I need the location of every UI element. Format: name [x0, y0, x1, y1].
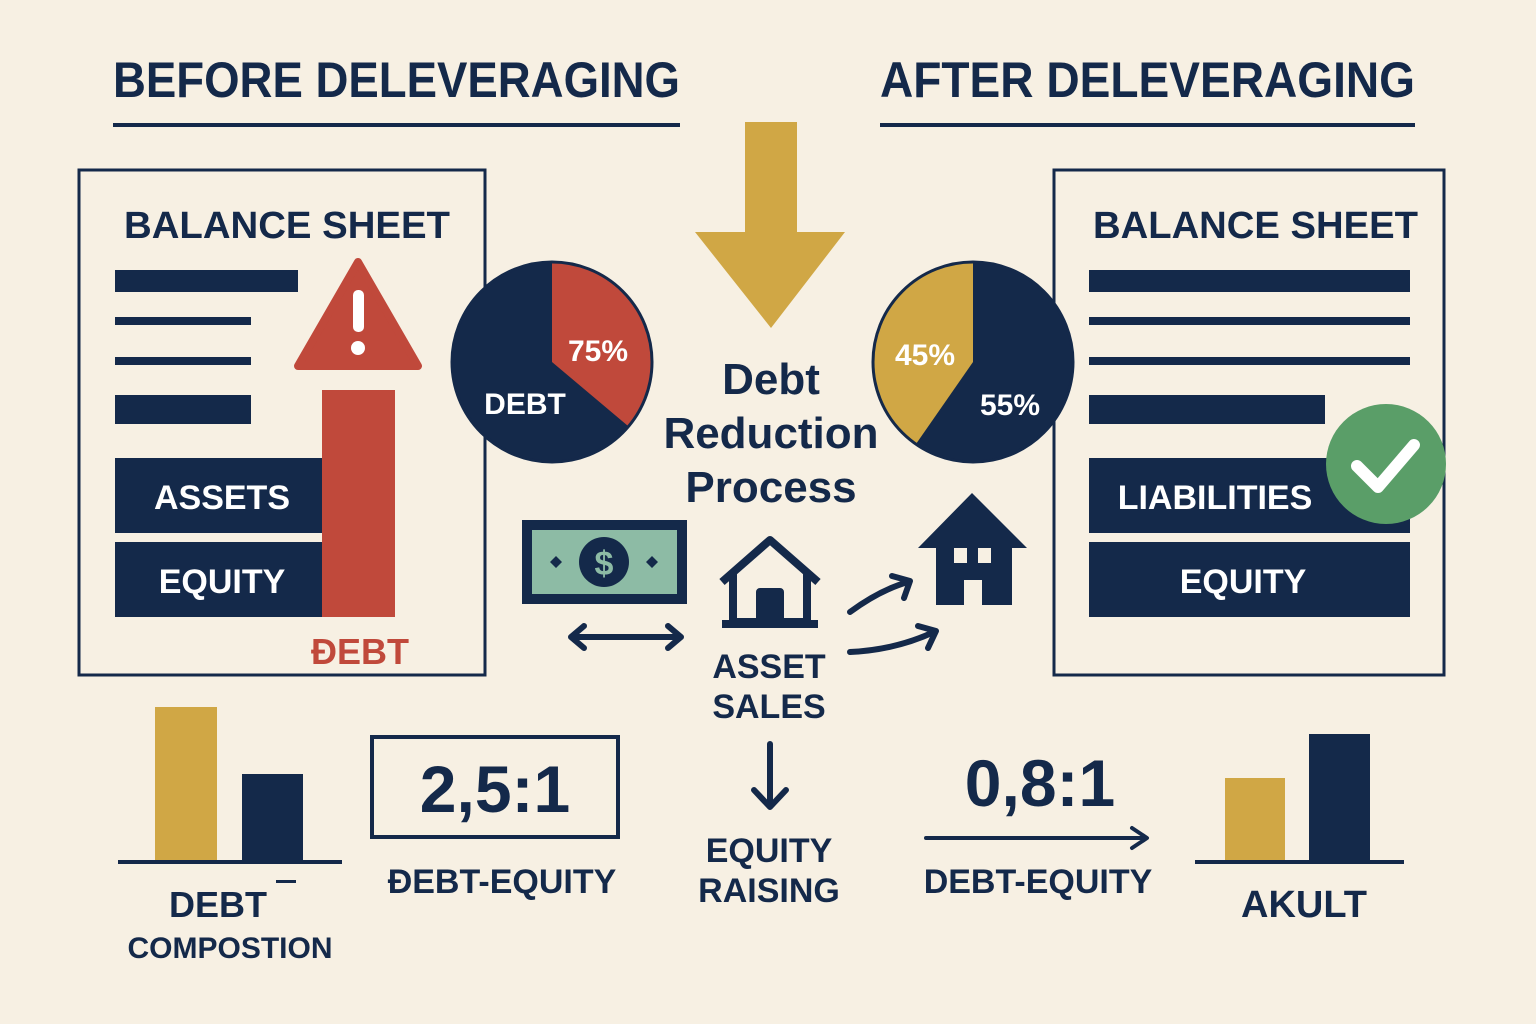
text: debt reduction process: Debt [722, 355, 820, 404]
assets bar [115, 458, 322, 533]
text: debt reduction process [663, 355, 879, 512]
text: equity raising: EQUITY [706, 832, 833, 870]
equity bar [1089, 542, 1410, 617]
icon: house filled [918, 493, 1027, 605]
panel: after balance sheet: BALANCE SHEET [1093, 205, 1418, 247]
equity bar: EQUITY [159, 563, 286, 601]
pie: before: 75% [568, 335, 628, 368]
liabilities bar [1089, 458, 1410, 533]
equity bar: EQUITY [1180, 563, 1307, 601]
text: asset sales: SALES [712, 688, 826, 726]
liabilities bar: LIABILITIES [1118, 479, 1312, 517]
ratio box before [372, 737, 618, 837]
text: debt reduction process: Process [685, 463, 857, 512]
text: debt composition [127, 880, 333, 965]
text: asset sales: ASSET [712, 648, 826, 686]
icon: house outline [722, 540, 818, 624]
icon: check [1326, 404, 1446, 524]
title: before: BEFORE DELEVERAGING [113, 52, 680, 108]
text: debt composition: COMPOSTION [127, 932, 333, 965]
arrow: down gold [695, 122, 845, 328]
debt bar [322, 390, 395, 617]
pie: after [873, 262, 1073, 462]
icon: warning [298, 262, 418, 366]
ratio box before: 2,5:1 [420, 752, 570, 826]
label: akult: AKULT [1241, 884, 1367, 926]
pie: before: DEBT [484, 388, 566, 421]
text: debt reduction process: Reduction [663, 409, 879, 458]
panel: after balance sheet [1054, 170, 1446, 675]
pie: after: 55% [980, 389, 1040, 422]
icon: money bill: $ [595, 545, 614, 583]
text: equity raising: RAISING [698, 872, 840, 910]
chart: after bars [1195, 734, 1404, 864]
chart: before bars [118, 707, 342, 864]
arrow: down small [754, 744, 786, 807]
text: equity raising [698, 832, 840, 910]
arrow: double [571, 626, 681, 648]
ratio after: 0,8:1 [965, 746, 1115, 820]
icon: money bill [522, 520, 687, 604]
panel: before balance sheet: ĐEBT [311, 631, 409, 672]
title: after: AFTER DELEVERAGING [880, 52, 1415, 108]
panel: before balance sheet: BALANCE SHEET [124, 205, 450, 247]
title: before [113, 52, 680, 127]
equity bar [115, 542, 322, 617]
label: debt-equity before: ĐEBT-EQUITY [388, 863, 617, 901]
arrows: to house [850, 576, 936, 652]
text: debt composition: DEBT [169, 884, 267, 925]
assets bar: ASSETS [154, 479, 290, 517]
arrow: right [926, 828, 1147, 848]
panel: before balance sheet [79, 170, 485, 675]
pie: after: 45% [895, 339, 955, 372]
pie: before [452, 262, 652, 462]
text: asset sales [712, 648, 826, 726]
label: debt-equity after: DEBT-EQUITY [924, 863, 1153, 901]
